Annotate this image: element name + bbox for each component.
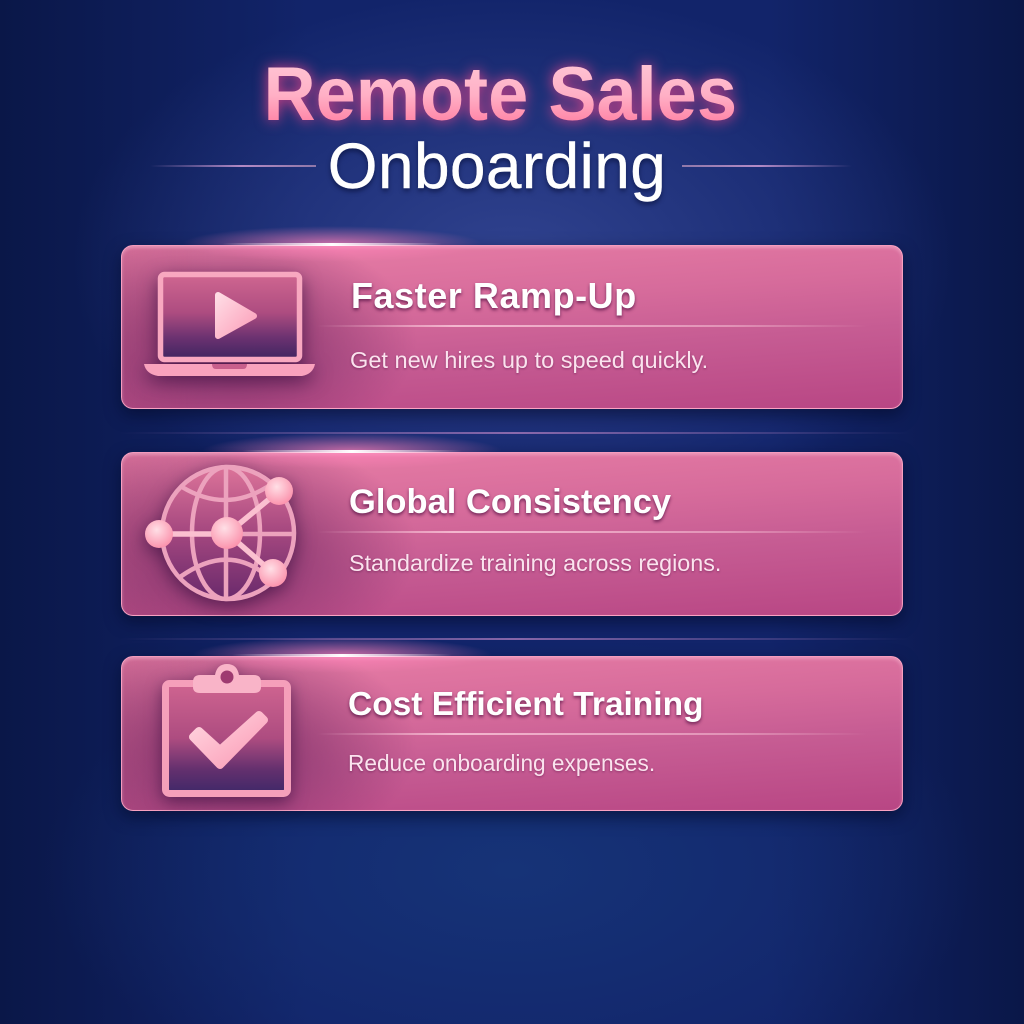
description: Get new hires up to speed quickly. xyxy=(350,347,708,373)
icon: clipboard with check mark xyxy=(152,660,301,811)
description: Standardize training across regions. xyxy=(349,550,721,576)
heading: Global Consistency xyxy=(349,483,671,521)
subtitle: Onboarding: Onboarding xyxy=(328,130,666,202)
icon: globe with network nodes xyxy=(136,458,307,616)
panel: Cost Efficient Training xyxy=(121,656,903,811)
description: Reduce onboarding expenses. xyxy=(348,750,655,776)
title: Remote Sales: Remote Sales xyxy=(263,52,737,137)
icon: laptop with play button xyxy=(140,266,320,393)
panel: Faster Ramp-Up xyxy=(121,245,903,409)
heading: Faster Ramp-Up xyxy=(351,275,637,316)
heading: Cost Efficient Training xyxy=(348,686,704,723)
panel: Global Consistency xyxy=(121,452,903,616)
